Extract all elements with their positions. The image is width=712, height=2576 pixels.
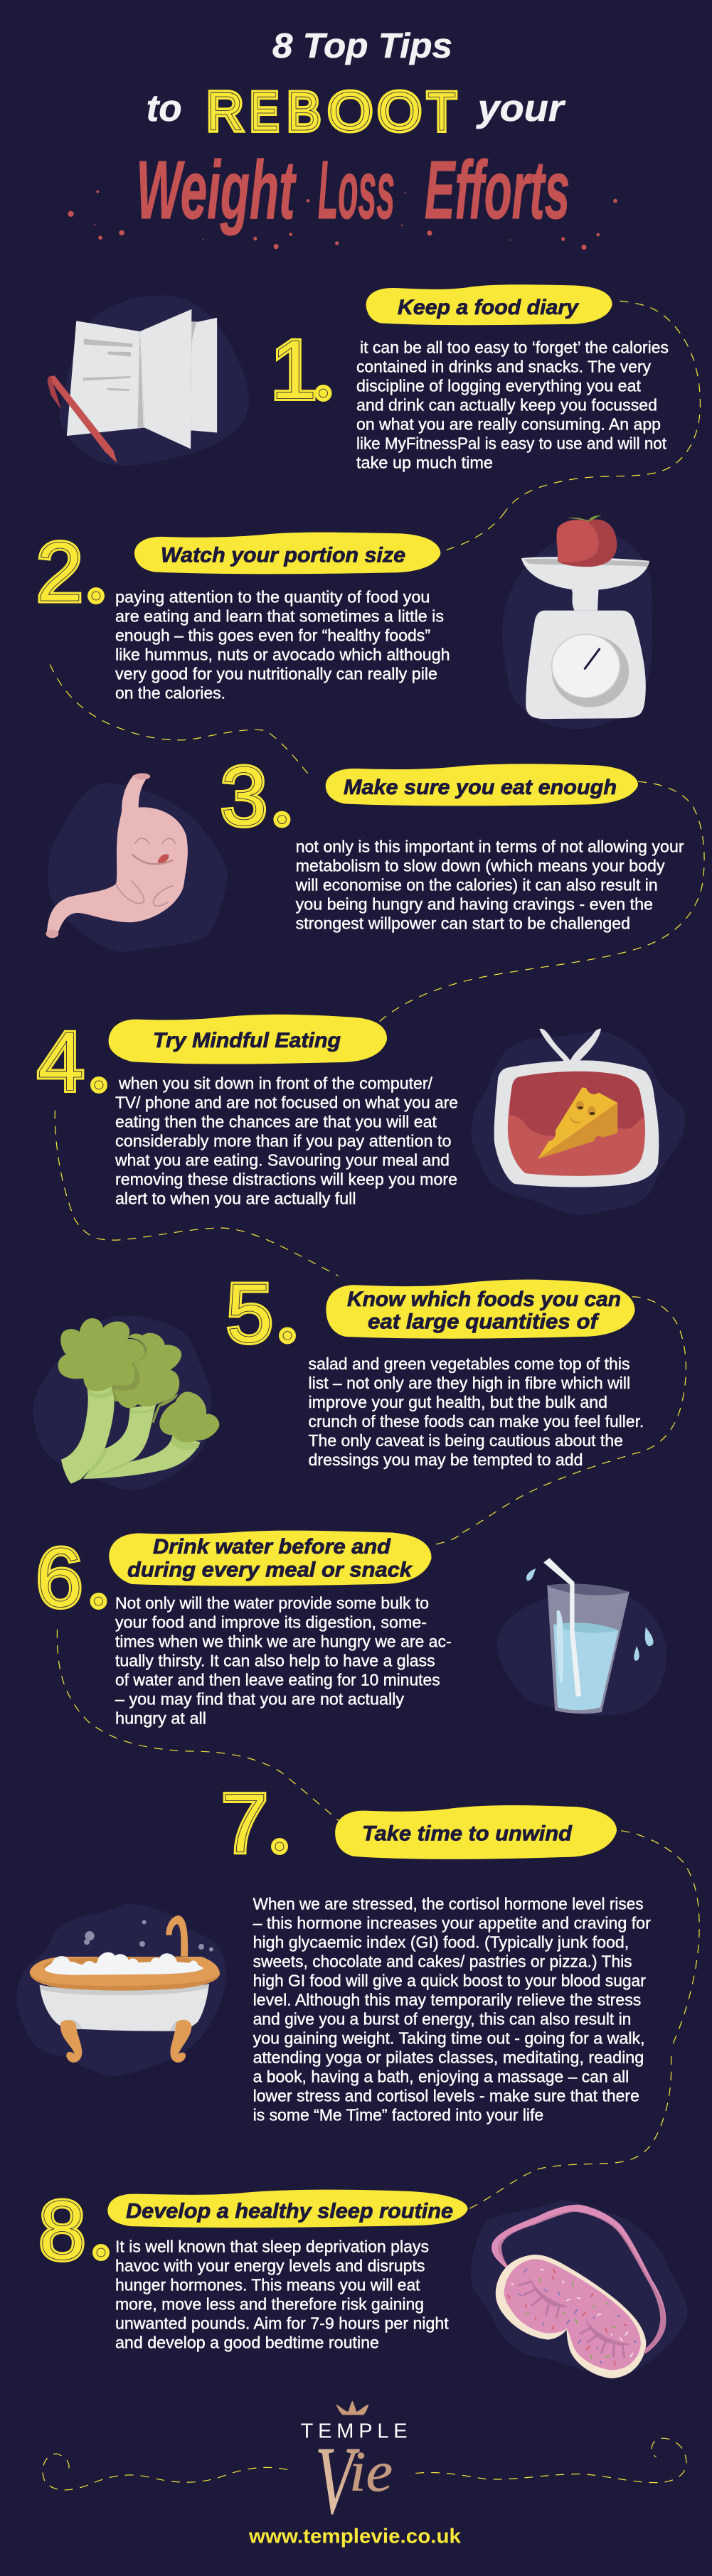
dashed connector: tip 6 to tip 7 <box>57 1630 340 1822</box>
body text tip 6: your food and improve its digestion, some- <box>115 1613 427 1631</box>
number 6: 6 <box>36 1532 83 1625</box>
title word: REBOOT: B <box>287 82 321 142</box>
title line: 8 Top Tips: 8 Top Tips <box>272 27 452 65</box>
heading pill: Make sure you eat enough <box>326 764 638 806</box>
body text tip 7: high glycaemic index (GI) food. (Typically junk food, <box>253 1933 629 1951</box>
body text tip 4: considerably more than if you pay attention to <box>115 1131 452 1150</box>
body text tip 7: a book, having a bath, enjoying a massage – can all <box>253 2067 629 2085</box>
body text tip 7: high GI food will give a quick boost to your blood sugar <box>253 1971 646 1989</box>
title word: REBOOT: T <box>427 82 456 142</box>
number 8 <box>39 2184 110 2278</box>
body text tip 5: improve your gut health, but the bulk and <box>309 1393 607 1411</box>
body text tip 2: paying attention to the quantity of food you <box>115 588 430 606</box>
title word: REBOOT: B <box>287 82 321 142</box>
number 2: 2 <box>36 525 83 619</box>
body text tip 4 <box>115 1074 458 1207</box>
body text tip 3: strongest willpower can start to be challenged <box>296 914 630 933</box>
dashed connector: tip 3 to tip 4 <box>377 781 704 1024</box>
body text tip 1: on what you are really consuming. An app <box>356 415 661 433</box>
number 5: 5 <box>226 1267 273 1361</box>
body text tip 1: and drink can actually keep you focussed <box>356 395 657 414</box>
icon: smiling stomach <box>46 773 228 953</box>
body text tip 2: enough – this goes even for “healthy foods” <box>115 626 430 645</box>
body text tip 3: metabolism to slow down (which means your body <box>296 856 665 875</box>
body text tip 7: attending yoga or pilates classes, meditating, reading <box>253 2048 644 2066</box>
number 7: 7 <box>221 1777 268 1871</box>
number 3: 3 <box>220 749 267 843</box>
body text tip 6: hungry at all <box>115 1709 206 1727</box>
number 1: 1 <box>270 323 317 417</box>
body text tip 6: times when we think we are hungry we are ac- <box>115 1632 452 1650</box>
body text tip 2: very good for you nutritionally can really pile <box>115 665 437 683</box>
body text tip 5 <box>309 1354 644 1469</box>
body text tip 1: it can be all too easy to ‘forget’ the calories <box>360 338 669 356</box>
icon: bubble bath <box>16 1903 226 2077</box>
dashed connector: tip 4 to tip 5 <box>55 1111 339 1276</box>
title line: Weight Loss Efforts <box>137 144 570 236</box>
brand word: Vie: V <box>315 2427 360 2534</box>
body text tip 4: alert to when you are actually full <box>115 1189 356 1207</box>
body text tip 1: take up much time <box>356 453 493 471</box>
brand word: Vie: ie <box>349 2441 393 2503</box>
dashed connector: tip 1 to tip 2 <box>444 301 700 550</box>
body text tip 7: lower stress and cortisol levels - make sure that there <box>253 2086 639 2105</box>
number 3 <box>220 749 290 843</box>
icon: crown <box>336 2401 368 2415</box>
heading pill: Try Mindful Eating <box>109 1015 387 1064</box>
panel: tip 1 keep a food diary <box>47 284 669 471</box>
title word: REBOOT: O <box>378 82 421 142</box>
body text tip 4: TV/ phone and are not focused on what you are <box>115 1093 458 1111</box>
title word: your: your <box>475 87 566 129</box>
number 8: 8 <box>39 2184 85 2278</box>
heading pill: Make sure you eat enough: Make sure you eat enough <box>344 776 617 799</box>
body text tip 6: Not only will the water provide some bulk to <box>115 1593 429 1612</box>
body text tip 5: crunch of these foods can make you feel fuller. <box>309 1412 644 1431</box>
body text tip 2 <box>115 588 450 702</box>
panel: tip 5 know which foods <box>33 1267 644 1490</box>
body text tip 3: will economise on the calories) it can also result in <box>295 876 658 894</box>
body text tip 6: of water and then leave eating for 10 minutes <box>115 1670 440 1689</box>
number 7: 7 <box>221 1777 268 1871</box>
body text tip 8: more, move less and therefore risk gaining <box>115 2295 424 2314</box>
title word: REBOOT: T <box>427 82 456 142</box>
title word: REBOOT: O <box>328 81 372 142</box>
body text tip 8: and develop a good bedtime routine <box>115 2334 379 2352</box>
body text tip 5: dressings you may be tempted to add <box>309 1450 583 1469</box>
heading pill: Take time to unwind: Take time to unwind <box>362 1822 573 1845</box>
body text tip 8: unwanted pounds. Aim for 7-9 hours per night <box>115 2314 449 2333</box>
number 6 <box>36 1532 107 1625</box>
body text tip 7: level. Although this may temporarily relieve the stress <box>253 1990 641 2009</box>
panel: tip 2 watch your portion size <box>36 515 652 729</box>
body text tip 8 <box>115 2238 449 2352</box>
body text tip 7: and give you a burst of energy, this can also result in <box>253 2009 631 2028</box>
body text tip 4: what you are eating. Savouring your meal and <box>115 1150 450 1169</box>
body text tip 8: havoc with your energy levels and disrupts <box>115 2257 425 2275</box>
body text tip 4: removing these distractions will keep you more <box>115 1170 457 1188</box>
title line: Weight Loss Efforts: Efforts <box>425 144 570 236</box>
number 4: 4 <box>38 1015 84 1109</box>
number 7 <box>221 1777 288 1871</box>
body text tip 6: tually thirsty. It can also help to have a glass <box>115 1651 435 1669</box>
heading pill: Try Mindful Eating: Try Mindful Eating <box>153 1029 341 1052</box>
icon: kitchen scale with tomato <box>502 515 652 729</box>
body text tip 7: you gaining weight. Taking time out - going for a walk, <box>253 2029 645 2047</box>
body text tip 7: sweets, chocolate and cakes/ pastries or pizza.) This <box>253 1952 632 1970</box>
number 1: 1 <box>270 323 317 417</box>
body text tip 6 <box>115 1593 452 1727</box>
heading pill: Know which foods you can eat large quantities of: eat large quantities of <box>368 1310 600 1333</box>
heading pill: Know which foods you can eat large quantities of: Know which foods you can <box>347 1288 621 1311</box>
heading pill: Keep a food diary <box>366 284 612 325</box>
panel: tip 6 drink water <box>36 1531 666 1727</box>
footer logo: Temple Vie <box>248 2401 462 2548</box>
footer dashed curl left <box>43 2454 287 2490</box>
panel: tip 8 healthy sleep routine <box>39 2184 688 2378</box>
number 3: 3 <box>220 749 267 843</box>
number 2 <box>36 525 105 619</box>
panel: tip 3 make sure you eat enough <box>46 749 684 953</box>
body text tip 1: discipline of logging everything you eat <box>356 376 642 395</box>
website url: www.templevie.co.uk <box>248 2526 462 2548</box>
title word: REBOOT: O <box>328 81 372 142</box>
brand word: TEMPLE: TEMPLE <box>301 2420 408 2443</box>
body text tip 7 <box>253 1894 651 2124</box>
body text tip 2: on the calories. <box>115 684 225 702</box>
title word: REBOOT: R <box>207 81 243 142</box>
heading pill: Watch your portion size <box>134 533 440 574</box>
number 4: 4 <box>38 1015 84 1109</box>
panel: tip 4 try mindful eating <box>38 1015 685 1215</box>
body text tip 3 <box>295 838 684 933</box>
title word: to: to <box>147 87 182 129</box>
panel: tip 7 take time to unwind <box>16 1777 651 2124</box>
heading pill: Drink water before and during every meal or snack: during every meal or snack <box>127 1558 413 1581</box>
number 6: 6 <box>36 1532 83 1625</box>
body text tip 4: eating then the chances are that you will eat <box>115 1112 437 1131</box>
body text tip 5: salad and green vegetables come top of this <box>309 1354 630 1373</box>
body text tip 3: you being hungry and having cravings - even the <box>296 894 653 913</box>
body text tip 6: – you may find that you are not actually <box>115 1689 404 1708</box>
title <box>68 27 617 250</box>
body text tip 2: are eating and learn that sometimes a little is <box>115 607 444 626</box>
heading pill: Drink water before and during every meal or snack <box>109 1531 432 1586</box>
title line: Weight Loss Efforts: Weight <box>137 144 297 236</box>
title word: REBOOT: R <box>207 81 243 142</box>
body text tip 7: – this hormone increases your appetite and craving for <box>253 1913 651 1932</box>
dashed connector: tip 2 to tip 3 <box>50 664 309 775</box>
dashed connector: tip 7 to tip 8 <box>468 1831 699 2209</box>
heading pill: Know which foods you can eat large quantities of <box>326 1280 635 1339</box>
icon: notebook and pen <box>47 295 249 466</box>
body text tip 5: The only caveat is being cautious about the <box>309 1431 623 1450</box>
body text tip 3: not only is this important in terms of not allowing your <box>296 838 684 856</box>
icon: glass of water with straw <box>497 1558 666 1716</box>
title word: REBOOT <box>207 81 456 142</box>
body text tip 4: when you sit down in front of the computer/ <box>118 1074 433 1092</box>
number 5 <box>226 1267 296 1361</box>
body text tip 7: is some “Me Time” factored into your life <box>253 2105 543 2124</box>
number 4 <box>38 1015 107 1109</box>
body text tip 1: contained in drinks and snacks. The very <box>356 357 651 375</box>
red paint speckles <box>68 191 617 250</box>
icon: sleep mask <box>471 2200 688 2378</box>
number 8: 8 <box>39 2184 85 2278</box>
number 5: 5 <box>226 1267 273 1361</box>
body text tip 1: like MyFitnessPal is easy to use and will not <box>356 434 667 452</box>
heading pill: Drink water before and during every meal or snack: Drink water before and <box>153 1535 391 1559</box>
body text tip 8: It is well known that sleep deprivation plays <box>115 2238 429 2256</box>
heading pill: Take time to unwind <box>335 1805 617 1859</box>
heading pill: Develop a healthy sleep routine <box>107 2190 468 2228</box>
footer dashed curl right <box>415 2438 686 2483</box>
number 2: 2 <box>36 525 83 619</box>
heading pill: Keep a food diary: Keep a food diary <box>398 296 579 319</box>
title word: REBOOT: E <box>250 81 279 142</box>
body text tip 7: When we are stressed, the cortisol hormone level rises <box>253 1894 644 1913</box>
title line: Weight Loss Efforts: Loss <box>318 144 395 236</box>
heading pill: Develop a healthy sleep routine: Develop a healthy sleep routine <box>126 2199 453 2223</box>
body text tip 5: list – not only are they high in fibre which will <box>309 1374 630 1392</box>
icon: television showing cheese <box>471 1029 685 1215</box>
body text tip 2: like hummus, nuts or avocado which although <box>115 646 450 664</box>
heading pill: Watch your portion size: Watch your portion size <box>161 543 405 567</box>
title word: REBOOT: O <box>378 82 421 142</box>
title word: REBOOT: E <box>250 81 279 142</box>
body text tip 8: hunger hormones. This means you will eat <box>115 2276 420 2294</box>
body text tip 1 <box>356 338 669 471</box>
dashed connector: tip 5 to tip 6 <box>436 1297 686 1544</box>
icon: broccoli <box>33 1315 219 1490</box>
